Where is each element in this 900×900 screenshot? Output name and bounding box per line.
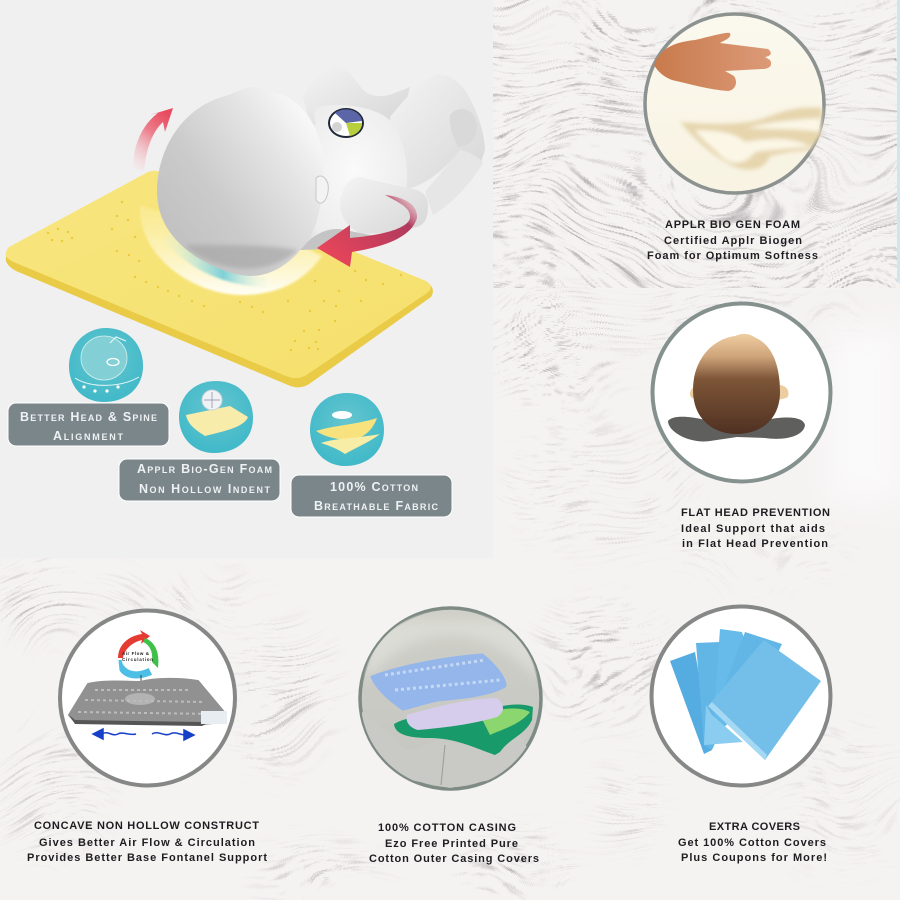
text: flat head prevention: Ideal Support that aids (681, 523, 825, 535)
label: bio-gen foam: Non Hollow Indent (139, 482, 270, 496)
text: applr bio gen foam: APPLR BIO GEN FOAM (665, 219, 800, 231)
panel: foam circle (645, 14, 824, 193)
arrow: lower pointing left (317, 195, 417, 267)
hand (654, 33, 771, 91)
text: cotton casing (369, 822, 539, 865)
icon: cotton (310, 393, 384, 466)
forearm (425, 150, 483, 215)
text: extra covers: Get 100% Cotton Covers (678, 837, 826, 849)
panel: air flow circle (60, 610, 235, 786)
ears (690, 385, 788, 400)
label: breathable cotton: Breathable Fabric (314, 499, 438, 513)
text: applr bio gen foam: Certified Applr Biogen (664, 235, 802, 247)
raised leg (390, 75, 485, 190)
text: concave construct (27, 820, 267, 864)
text: concave construct: CONCAVE NON HOLLOW CONSTRUCT (34, 820, 259, 832)
panel: flat head circle (652, 304, 830, 482)
blue covers stack (670, 629, 821, 760)
text: cotton casing: Ezo Free Printed Pure (385, 838, 518, 850)
icon: foam (179, 381, 253, 453)
hand and foot (450, 109, 477, 147)
foam impression (680, 107, 822, 169)
text: extra covers: Plus Coupons for More! (681, 852, 827, 864)
lilac pillow (407, 698, 503, 730)
label: bio-gen foam: Applr Bio-Gen Foam (137, 462, 272, 476)
lower arm (340, 177, 428, 234)
text: applr bio gen foam: Foam for Optimum Softness (647, 250, 818, 262)
text: extra covers (678, 821, 827, 864)
icon: air flow cycle (118, 630, 158, 695)
arrow: up left (133, 108, 173, 171)
text: extra covers: EXTRA COVERS (709, 821, 800, 833)
panel: cotton casing circle (360, 608, 541, 789)
label: bio-gen foam (119, 459, 280, 501)
cushion (668, 417, 805, 441)
text: flat head prevention: FLAT HEAD PREVENTION (681, 507, 830, 519)
arrows: air out (93, 729, 194, 740)
ear (316, 176, 328, 203)
text: flat head prevention: in Flat Head Prevention (682, 538, 828, 550)
label: breathable cotton (291, 475, 452, 517)
pillow (6, 171, 433, 387)
icon: head alignment (69, 328, 143, 402)
icon: air flow cycle: Air Flow & (122, 651, 150, 656)
text: concave construct: Provides Better Base Fontanel Support (27, 852, 267, 864)
text: flat head prevention (681, 507, 830, 550)
text: concave construct: Gives Better Air Flow & Circulation (39, 837, 255, 849)
head (157, 87, 323, 276)
panel: pillow illustration (0, 0, 493, 558)
icon: air flow cycle: Circulation (122, 657, 153, 662)
grey pillow (69, 679, 227, 726)
green pillow (394, 705, 533, 755)
blue pillow (372, 655, 505, 709)
text: cotton casing: Cotton Outer Casing Covers (369, 853, 539, 865)
label: better head and spine alignment: Alignment (53, 429, 124, 443)
label: better head and spine alignment (8, 403, 169, 446)
crescent under head (140, 205, 322, 295)
label: better head and spine alignment: Better Head & Spine (20, 410, 157, 424)
panel: extra covers circle (652, 606, 830, 786)
upper thigh (303, 66, 410, 125)
baby head from above (693, 334, 780, 434)
baby (157, 66, 485, 276)
text: cotton casing: 100% COTTON CASING (378, 822, 516, 834)
torso (300, 105, 407, 250)
diaper logo (328, 108, 364, 138)
text: applr bio gen foam (647, 219, 818, 262)
label: breathable cotton: 100% Cotton (330, 480, 418, 494)
